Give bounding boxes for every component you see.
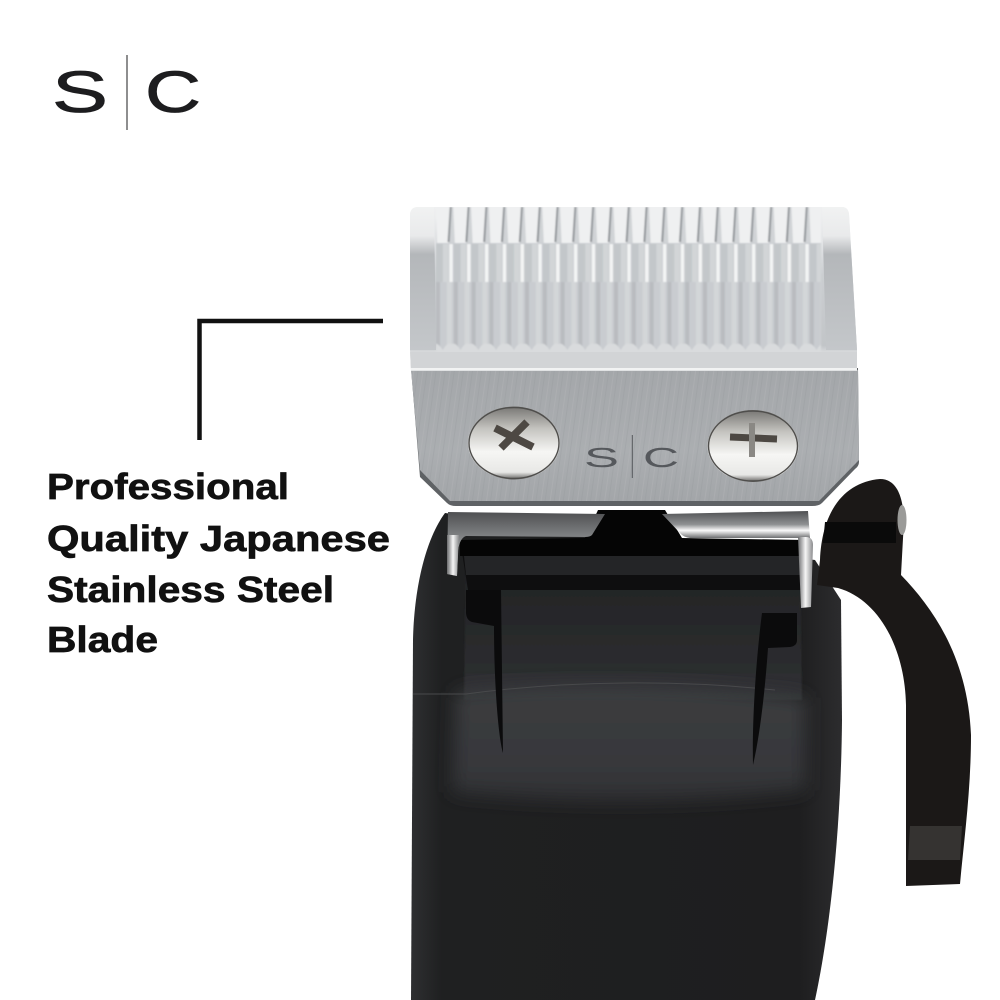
right mounting screw (708, 410, 798, 482)
left slot (466, 590, 503, 753)
left mounting screw (468, 406, 560, 480)
body housing (411, 513, 842, 1000)
tooth pattern (436, 207, 821, 357)
plate face (411, 370, 859, 501)
engraved C: C (643, 442, 679, 473)
callout text (47, 466, 390, 660)
callout text: Stainless Steel (47, 569, 334, 610)
adjustment lever (817, 479, 971, 886)
bracket left strip (447, 512, 605, 576)
screw cross slot (730, 437, 777, 439)
callout text: Blade (47, 619, 158, 660)
lever pivot screw (898, 505, 906, 535)
engraved blade logo (584, 435, 679, 478)
engraved S: S (584, 442, 619, 473)
blade base plate (411, 368, 859, 506)
callout leader line (200, 321, 383, 440)
logo letter C: C (145, 60, 201, 125)
plate bevel (411, 368, 859, 506)
callout text: Professional (47, 466, 289, 507)
metal bracket (447, 510, 813, 608)
screw head (708, 410, 798, 482)
bracket top dark (460, 540, 805, 590)
lever arm (817, 479, 971, 886)
brand logo (52, 55, 201, 130)
screw rim (708, 411, 798, 481)
bracket right strip (662, 511, 810, 538)
screw head (468, 406, 560, 480)
clipper body (411, 513, 842, 1000)
right blade shoulder (823, 240, 857, 350)
plate brushed texture (411, 370, 859, 501)
bracket right side (798, 537, 813, 608)
lever highlight lower (908, 826, 962, 860)
left blade shoulder (410, 240, 436, 350)
logo divider (126, 55, 128, 130)
bracket left side (447, 535, 459, 576)
clip plate (464, 555, 802, 700)
seam line (413, 683, 775, 694)
lever highlight upper (823, 522, 896, 543)
body upper highlight (452, 686, 806, 801)
logo letter S: S (52, 60, 108, 125)
screw rim (469, 408, 559, 478)
callout text: Quality Japanese (47, 518, 390, 559)
cutting teeth (405, 205, 861, 371)
blade upper metal (405, 205, 861, 371)
engraved divider (632, 435, 633, 478)
screw cross slot (495, 422, 533, 448)
screw cross highlight (749, 423, 755, 457)
right slot (753, 613, 797, 765)
lower ground band (410, 352, 411, 368)
bracket notch (460, 510, 805, 556)
blade (405, 205, 861, 506)
bracket inner ledge (464, 556, 802, 575)
band highlight (409, 368, 859, 370)
